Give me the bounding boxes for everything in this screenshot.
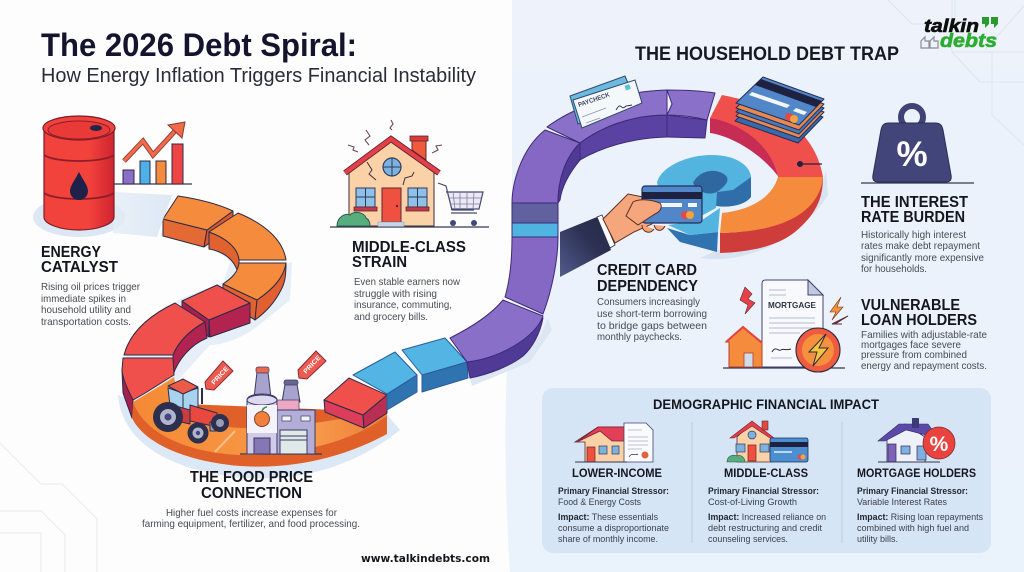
icon: interest rate weight [861,106,974,183]
column: mortgage holders: utility bills. [857,534,898,545]
column: middle-class: Cost-of-Living Growth [708,497,797,508]
icon: interest rate weight: % [896,135,928,174]
column: middle-class: counseling services. [708,534,788,545]
icon: mortgage document: MORTGAGE [768,301,817,310]
text: energy catalyst: household utility and [41,305,131,316]
text: middle-class strain: insurance, commuting, [354,300,452,311]
column: middle-class [708,421,826,545]
text: the interest rate burden: rates make debt repayment [861,241,980,252]
segment: orange ring [720,177,823,253]
segment: orange 3 [223,263,286,320]
column: lower-income: Primary Financial Stressor: [558,486,669,497]
segment: blue 1 [353,352,417,410]
segment: red 1 [182,285,250,337]
text: vulnerable loan holders: VULNERABLE [861,297,960,314]
segment: blue 2 [402,338,468,392]
text: the interest rate burden: THE INTEREST [861,194,968,211]
title [41,27,476,87]
segment: blue spiral centre [657,155,751,252]
panel: demographic financial impact [542,388,991,553]
segment: orange 1 [163,196,233,247]
column: mortgage holders: MORTGAGE HOLDERS [857,468,976,480]
text: middle-class strain [352,239,466,323]
icon: hand holding card [560,186,702,277]
icon: food factory [240,367,322,454]
logo: talkin debts: talkin [924,16,979,36]
column: lower-income: Food & Energy Costs [558,497,641,508]
heading: the household debt trap: THE HOUSEHOLD DEBT TRAP [635,44,899,65]
segment: purple arc 1 [547,90,667,160]
text: vulnerable loan holders: Families with adjustable-rate [861,330,987,341]
debt spiral path: right section [450,90,828,386]
debt spiral path: left section [118,196,468,478]
panel heading: DEMOGRAPHIC FINANCIAL IMPACT [653,397,880,412]
text: energy catalyst: transportation costs. [41,317,131,328]
column: lower-income: consume a disproportionate [558,523,669,534]
icon: mortgage document [723,280,848,372]
text: middle-class strain: and grocery bills. [354,312,428,323]
text: energy catalyst [41,244,141,328]
icon: house and utility bill [575,423,653,462]
logo: talkin debts [921,16,998,52]
text: the interest rate burden: RATE BURDEN [861,209,965,226]
text: vulnerable loan holders [861,297,987,372]
text: the food price connection: THE FOOD PRICE [190,469,313,486]
text: credit card dependency: Consumers increasingly [597,297,701,308]
text: credit card dependency: DEPENDENCY [597,278,698,295]
text: energy catalyst: immediate spikes in [41,294,126,305]
icon: house and percent badge: % [930,433,949,456]
icon: price tag on factory [298,351,326,379]
text: the interest rate burden: for households. [861,264,927,275]
segment: orange 2 [209,213,286,278]
text: credit card dependency: CREDIT CARD [597,262,697,279]
text: middle-class strain: struggle with rising [354,289,437,300]
column: lower-income: share of monthly income. [558,534,658,545]
title: How Energy Inflation Triggers Financial Instability [41,65,476,87]
logo: talkin debts: debts [940,31,997,52]
text: the interest rate burden: Historically high interest [861,230,966,241]
segment: purple arc 2 [667,90,715,138]
segment: red block [324,378,387,428]
column: middle-class: MIDDLE-CLASS [724,468,808,480]
text: vulnerable loan holders: energy and repayment costs. [861,361,987,372]
icon: tractor [153,379,229,444]
text: middle-class strain: MIDDLE-CLASS [352,239,466,256]
icon: house and credit card [727,421,808,462]
text: vulnerable loan holders: pressure from combined [861,350,967,361]
segment: red ring [710,95,823,177]
text: the food price connection: CONNECTION [201,485,302,502]
segment: red 2 [124,303,207,375]
text: the interest rate burden: significantly more expensive [861,253,984,264]
title: The 2026 Debt Spiral: [41,27,357,63]
column: mortgage holders: combined with high fuel and [857,523,969,534]
column: middle-class: Impact: Increased reliance on [708,512,826,523]
icon: rising price chart [113,122,192,184]
icon: price tag on tractor [205,361,233,390]
column: mortgage holders: Impact: Rising loan repayments [857,512,983,523]
icon: oil barrel [33,116,172,237]
column: lower-income [558,423,669,545]
column: middle-class: debt restructuring and credit [708,523,822,534]
text: the food price connection [142,469,360,530]
text: energy catalyst: Rising oil prices trigger [41,282,141,293]
text: the food price connection: farming equipment, fertilizer, and food processing. [142,519,360,530]
column: mortgage holders [857,418,983,545]
column: mortgage holders: Variable Interest Rates [857,497,947,508]
icon: credit card stack [735,77,824,143]
website url: www.talkindebts.com [361,552,490,565]
text: vulnerable loan holders: LOAN HOLDERS [861,312,977,329]
icon: cracked house [330,120,489,227]
text: the food price connection: Higher fuel costs increase expenses for [166,508,338,519]
column: middle-class: Primary Financial Stressor: [708,486,819,497]
text: energy catalyst: CATALYST [41,259,118,276]
icon: price tag on factory: PRICE [302,354,323,375]
text: energy catalyst: ENERGY [41,244,101,261]
segment: purple lower [450,300,543,378]
column: lower-income: LOWER-INCOME [572,468,662,480]
column: mortgage holders: Primary Financial Stressor: [857,486,968,497]
column: lower-income: Impact: These essentials [558,512,658,523]
segment: orange food base [132,377,387,467]
text: credit card dependency [597,262,707,343]
text: credit card dependency: monthly paychecks. [597,332,682,343]
icon: paycheck [570,76,642,128]
text: middle-class strain: Even stable earners now [354,277,461,288]
text: middle-class strain: STRAIN [352,254,407,271]
text: credit card dependency: use short-term borrowing [597,309,707,320]
text: credit card dependency: to bridge gaps between [597,321,707,332]
segment: purple column [505,130,580,314]
icon: price tag on tractor: PRICE [210,365,231,386]
text: the interest rate burden [861,194,984,275]
segment: red 3 [122,358,174,418]
text: vulnerable loan holders: mortgages face severe [861,340,961,351]
icon: paycheck: PAYCHECK [577,91,611,109]
